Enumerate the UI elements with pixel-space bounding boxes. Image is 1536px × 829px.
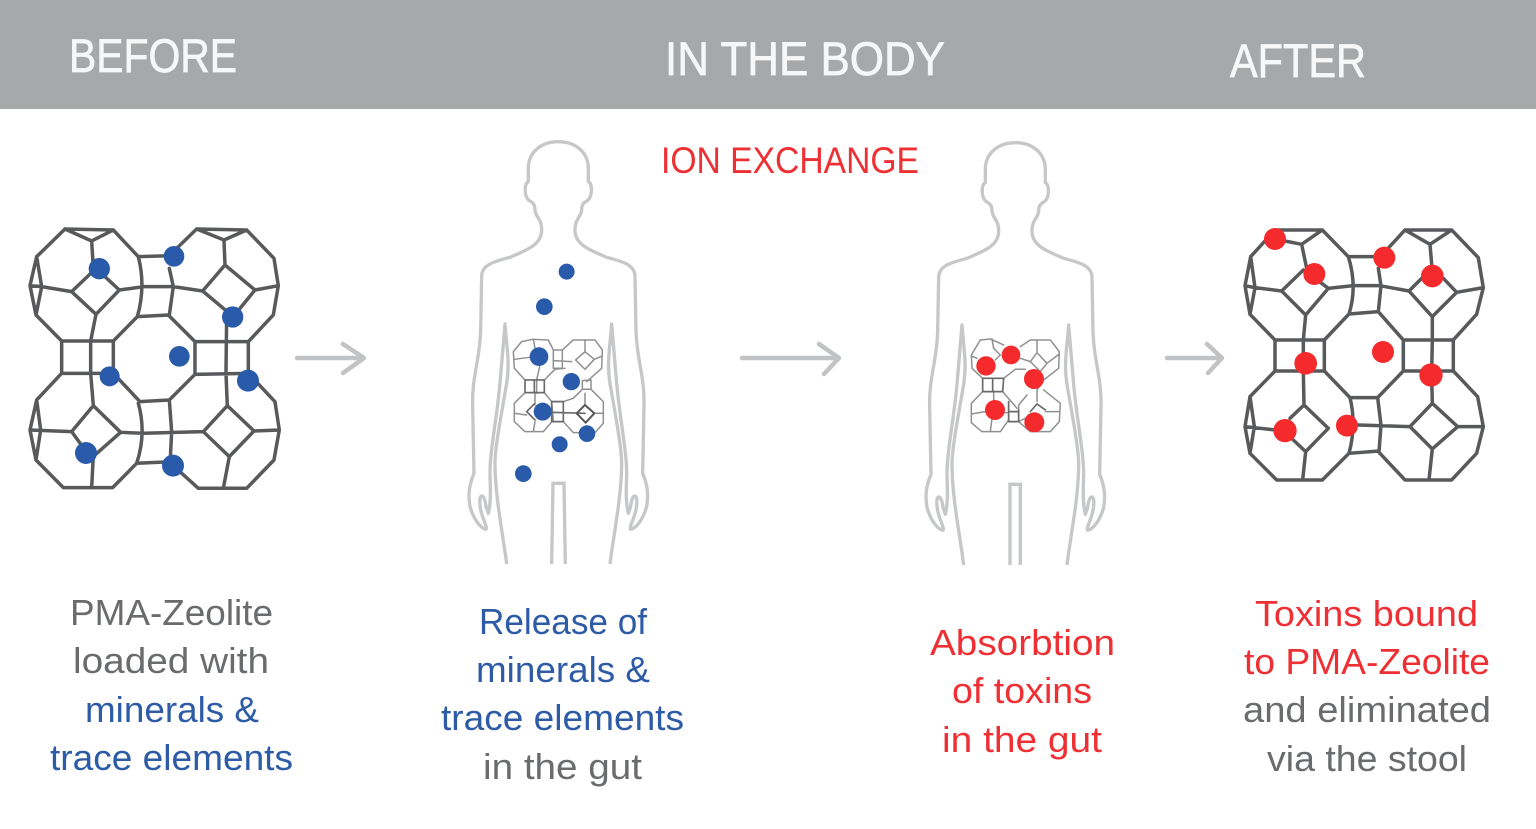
small zeolite lattice xyxy=(971,339,1060,432)
text block: after caption: and eliminated xyxy=(1243,689,1491,730)
body outline xyxy=(926,143,1105,565)
absorbed toxin dots xyxy=(976,346,1044,432)
text block: absorption caption: Absorbtion xyxy=(930,622,1115,663)
text block: release caption: Release of xyxy=(479,601,648,642)
text block: absorption caption: in the gut xyxy=(942,719,1102,760)
text block: absorption caption xyxy=(930,622,1115,760)
arrow: body to body xyxy=(742,344,839,374)
text block: before caption: loaded with xyxy=(73,640,269,681)
arrow: body to after xyxy=(1167,344,1222,373)
text block: after caption: to PMA-Zeolite xyxy=(1244,641,1490,682)
bound toxin dots xyxy=(1264,228,1444,442)
text block: release caption: in the gut xyxy=(483,746,642,787)
text block: after caption: via the stool xyxy=(1267,738,1467,779)
body outline xyxy=(469,142,648,564)
text block: release caption: trace elements xyxy=(441,697,684,738)
heading: before: BEFORE xyxy=(69,29,237,82)
text block: after caption: Toxins bound xyxy=(1255,593,1478,634)
text block: after caption xyxy=(1243,593,1491,779)
text block: release caption xyxy=(441,601,684,787)
panel: zeolite with bound toxins xyxy=(1245,228,1483,480)
arrow: before to body xyxy=(297,344,364,373)
panel: zeolite loaded with minerals xyxy=(30,229,279,488)
heading: in the body: IN THE BODY xyxy=(665,32,945,85)
text block: before caption: trace elements xyxy=(50,737,293,778)
released mineral dots xyxy=(515,264,595,482)
zeolite lattice xyxy=(30,229,279,488)
panel: body releasing minerals xyxy=(469,142,648,564)
small zeolite lattice xyxy=(513,339,603,433)
zeolite lattice xyxy=(1245,230,1483,480)
text block: before caption xyxy=(50,592,293,778)
panel: body absorbing toxins xyxy=(926,143,1105,565)
mineral dots xyxy=(75,246,259,477)
heading: after: AFTER xyxy=(1230,34,1366,87)
text block: before caption: PMA-Zeolite xyxy=(70,592,273,633)
text block: absorption caption: of toxins xyxy=(952,670,1092,711)
header band xyxy=(0,0,1536,109)
heading: ion exchange: ION EXCHANGE xyxy=(661,140,919,181)
text block: release caption: minerals & xyxy=(476,649,650,690)
text block: before caption: minerals & xyxy=(85,689,259,730)
